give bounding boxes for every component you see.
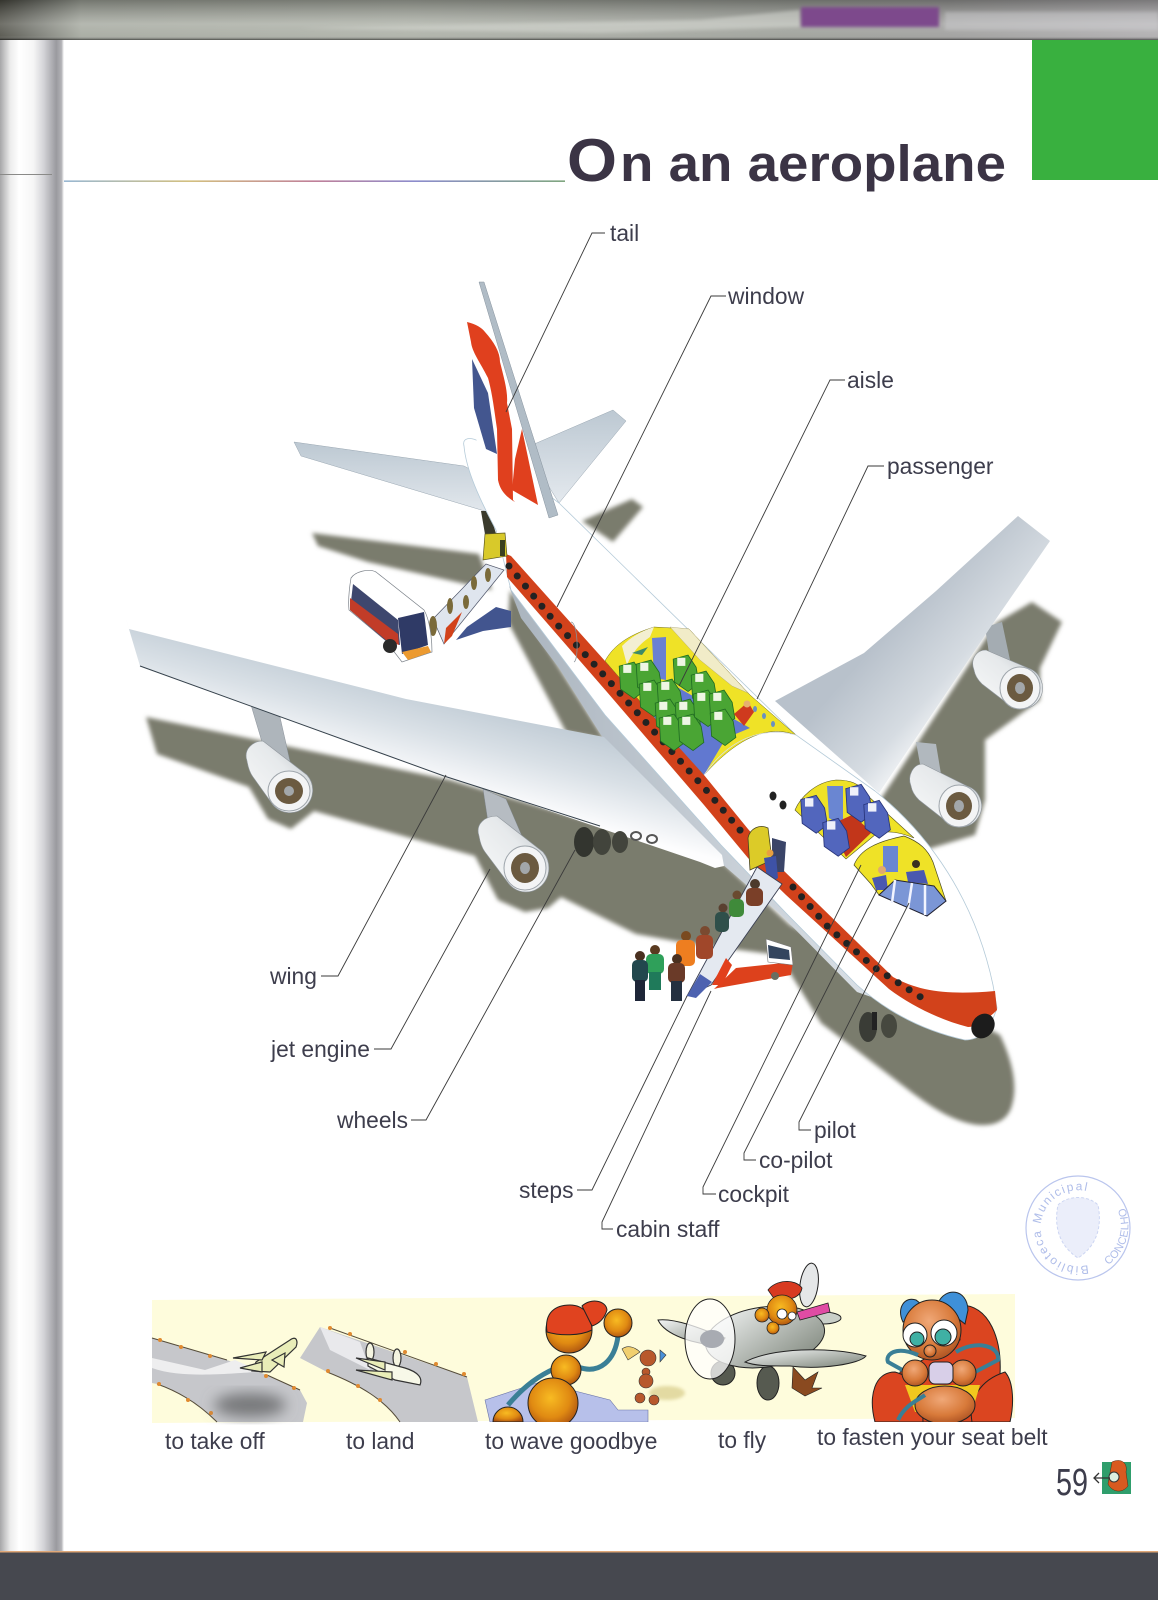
label: passenger: passenger xyxy=(887,453,994,479)
ears xyxy=(901,1292,968,1324)
far engines xyxy=(910,622,1043,827)
door outline xyxy=(571,622,577,662)
eyes xyxy=(903,1320,957,1347)
small waving figure xyxy=(622,1347,666,1405)
label: co-pilot: co-pilot xyxy=(759,1147,833,1173)
nose cone xyxy=(967,1009,999,1043)
illustration: to fasten your seat belt xyxy=(872,1292,1013,1424)
upper deck dots xyxy=(770,792,786,810)
buckle xyxy=(929,1362,953,1384)
arrow and mascot icon xyxy=(1094,1460,1131,1494)
label: cabin staff xyxy=(602,991,720,1242)
main cabin cutaway xyxy=(605,627,796,775)
caption: to take off: to take off xyxy=(165,1428,265,1454)
runway xyxy=(152,1338,307,1422)
red cheatline stripe xyxy=(506,554,997,1027)
flying insect xyxy=(792,1367,822,1396)
sand xyxy=(649,1386,685,1400)
label: window: window xyxy=(727,283,805,309)
runway highlight xyxy=(320,1327,370,1370)
label: pilot: pilot xyxy=(814,1117,856,1143)
page number: 59 xyxy=(1056,1462,1088,1504)
label: steps xyxy=(519,996,687,1203)
rear strut xyxy=(481,511,498,540)
runway edge lines xyxy=(152,1338,300,1422)
front door with crew member xyxy=(748,826,786,884)
label: wing xyxy=(269,775,446,989)
top book edge band xyxy=(0,0,1158,40)
airplane illustration xyxy=(126,282,1050,1043)
caption: to wave goodbye: to wave goodbye xyxy=(485,1428,657,1454)
caption: to fasten your seat belt: to fasten your seat belt xyxy=(817,1424,1048,1450)
caption: to land: to land xyxy=(346,1428,414,1454)
label: aisle xyxy=(679,367,894,686)
runway xyxy=(300,1327,478,1422)
cabin crew in red xyxy=(734,700,754,726)
tail plane xyxy=(805,1312,841,1324)
belly xyxy=(915,1386,975,1424)
left book binding xyxy=(0,40,64,1552)
label: wheels: wheels xyxy=(336,1107,408,1133)
runway smoke xyxy=(152,1358,262,1375)
library stamp: Biblioteca Municipal xyxy=(1032,1182,1088,1275)
wing xyxy=(745,1350,866,1367)
illustration: to fly xyxy=(658,1262,866,1400)
horizontal stabilisers xyxy=(294,410,626,515)
illustration strip background xyxy=(152,1294,1015,1423)
label: tail xyxy=(506,220,639,412)
front steps truck xyxy=(714,939,793,989)
seat xyxy=(485,1382,648,1422)
shoulders xyxy=(902,1360,976,1386)
nose xyxy=(924,1345,936,1357)
near engines and pylons xyxy=(246,705,549,892)
rear steps with passengers xyxy=(429,564,511,644)
title xyxy=(567,127,1006,194)
body spheres xyxy=(528,1309,632,1428)
label: wheels xyxy=(336,850,575,1133)
cockpit cutaway xyxy=(854,836,946,916)
foot xyxy=(493,1407,523,1422)
caption: to fly: to fly xyxy=(718,1427,767,1453)
front boarding steps xyxy=(687,867,782,998)
near wing xyxy=(126,619,724,868)
heading rule xyxy=(64,180,565,182)
label: cabin staff: cabin staff xyxy=(616,1216,720,1242)
head xyxy=(903,1300,961,1360)
plane taking off xyxy=(233,1338,297,1372)
head and cap xyxy=(546,1301,607,1353)
label: co-pilot xyxy=(744,890,877,1173)
label: cockpit: cockpit xyxy=(718,1181,790,1207)
propeller disc xyxy=(685,1299,735,1379)
stamp crest xyxy=(1057,1198,1099,1258)
illustration: to wave goodbye xyxy=(485,1301,685,1428)
label: cockpit xyxy=(703,865,861,1207)
label: wing: wing xyxy=(269,963,317,989)
pilot character xyxy=(755,1281,830,1334)
label: jet engine: jet engine xyxy=(270,1036,370,1062)
runway lights xyxy=(157,1338,296,1415)
windows row xyxy=(509,566,930,1003)
illustration: to land xyxy=(300,1326,478,1422)
illustration: to take off xyxy=(152,1338,307,1422)
arms xyxy=(508,1336,618,1405)
propeller blade xyxy=(658,1320,725,1345)
airport bus xyxy=(349,570,432,662)
library stamp xyxy=(1025,1175,1131,1281)
yellow seat xyxy=(905,1385,980,1412)
library stamp: CONCELHO xyxy=(1105,1209,1128,1264)
green passenger seats xyxy=(619,655,736,751)
far wing xyxy=(775,503,1050,793)
forward white hump line xyxy=(704,732,796,775)
bottom book edge band xyxy=(0,1551,1158,1600)
runway lights xyxy=(326,1326,466,1402)
title: O xyxy=(567,127,617,194)
tail fin xyxy=(467,282,558,518)
armchair xyxy=(872,1305,1013,1422)
fuselage belly xyxy=(509,586,880,1000)
title: n an aeroplane xyxy=(620,135,1006,192)
runway shadow xyxy=(214,1393,286,1417)
wheels xyxy=(711,1361,779,1400)
label: jet engine xyxy=(270,869,490,1062)
rear door xyxy=(483,533,507,560)
wing trailing edge xyxy=(140,666,600,826)
forward cabin cutaway xyxy=(795,780,914,859)
runway edge lines xyxy=(327,1328,467,1422)
label: tail: tail xyxy=(610,220,639,246)
tail fin xyxy=(797,1262,821,1308)
label: pilot xyxy=(799,903,909,1143)
label: passenger xyxy=(757,453,994,699)
people on the front steps and queue xyxy=(632,879,763,1001)
spinner xyxy=(700,1330,724,1348)
fuselage xyxy=(464,439,997,1040)
body xyxy=(701,1299,829,1375)
label: window xyxy=(557,283,805,607)
label: aisle: aisle xyxy=(847,367,894,393)
landing plane xyxy=(356,1343,421,1385)
main landing gear xyxy=(574,827,657,857)
ground shadows xyxy=(146,499,1062,1125)
green corner tab xyxy=(1032,40,1158,180)
seat belt and arms xyxy=(887,1345,998,1420)
nose landing gear xyxy=(859,1012,897,1042)
label: steps: steps xyxy=(519,1177,574,1203)
